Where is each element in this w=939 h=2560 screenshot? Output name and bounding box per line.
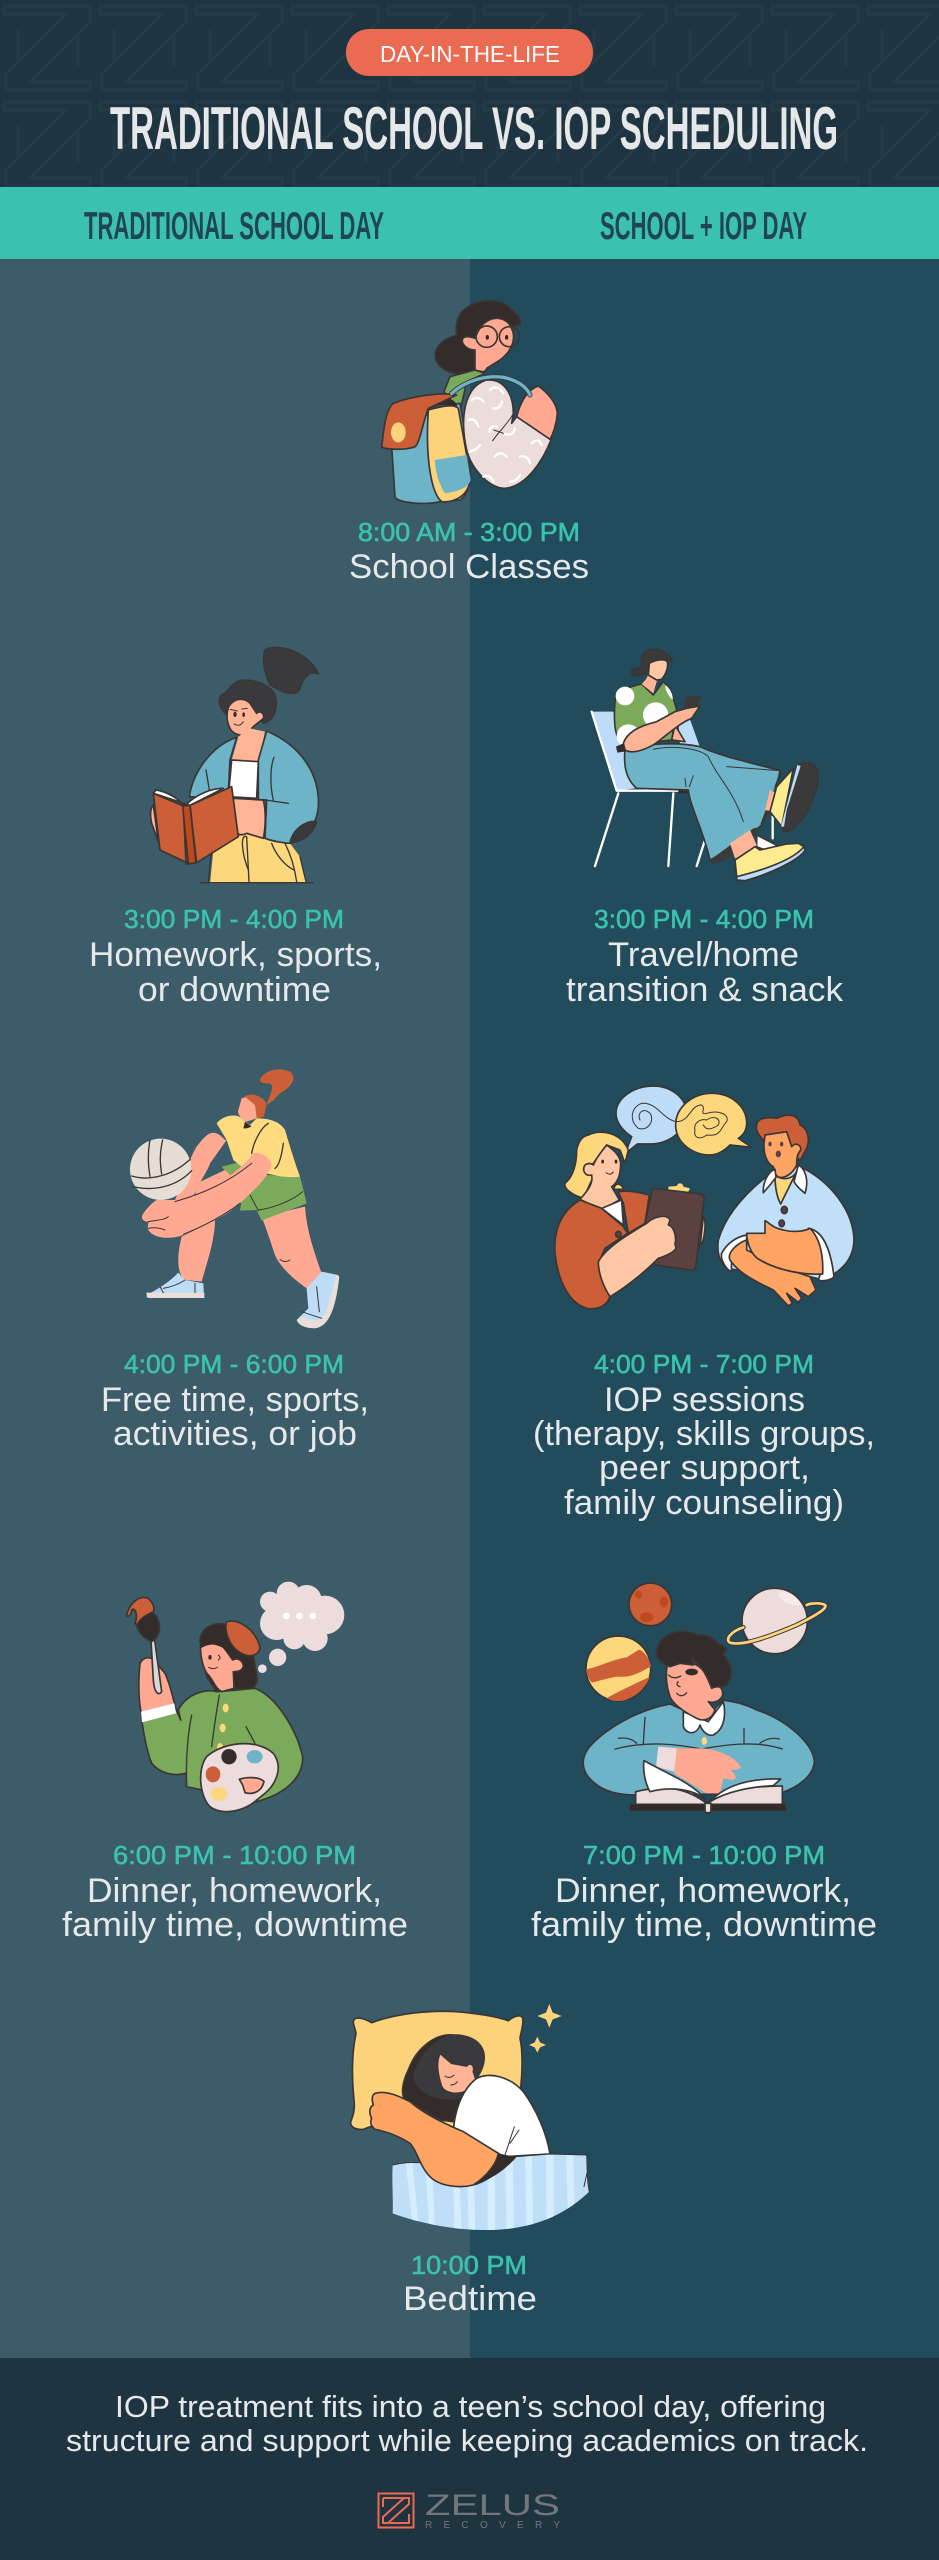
icon: dreaming student with planets (583, 1583, 825, 1813)
icon: woman on chair with phone (592, 649, 818, 881)
text: homework, sports, or downtime (89, 936, 382, 1009)
text: dinner, homework, family time, downtime left: Dinner, homework, (87, 1872, 382, 1910)
text: homework, sports, or downtime: Homework, sports, (89, 936, 382, 974)
text: IOP sessions list (533, 1381, 875, 1522)
text: free time, sports, activities, or job (101, 1381, 369, 1453)
label: 10:00 PM: 10:00 PM (411, 2250, 527, 2280)
text: IOP sessions list: (therapy, skills groups, (533, 1415, 875, 1453)
label: bedtime: Bedtime (403, 2280, 537, 2318)
label: 4:00 PM - 7:00 PM: 4:00 PM - 7:00 PM (594, 1349, 814, 1379)
icon: teen sleeping on pillow (351, 2004, 589, 2233)
text: free time, sports, activities, or job: Free time, sports, (101, 1381, 369, 1419)
label: 3:00 PM - 4:00 PM right: 3:00 PM - 4:00 PM (594, 904, 814, 934)
text: IOP sessions list: IOP sessions (604, 1381, 805, 1419)
label: 8:00 AM - 3:00 PM: 8:00 AM - 3:00 PM (358, 517, 580, 547)
panel: footer (0, 2358, 939, 2560)
text: dinner, homework, family time, downtime right (531, 1872, 877, 1944)
icon: girl reading a book (151, 647, 318, 883)
label: 7:00 PM - 10:00 PM: 7:00 PM - 10:00 PM (583, 1840, 825, 1870)
label: 3:00 PM - 4:00 PM left: 3:00 PM - 4:00 PM (124, 904, 344, 934)
label: 4:00 PM - 6:00 PM: 4:00 PM - 6:00 PM (124, 1349, 344, 1379)
label: 6:00 PM - 10:00 PM: 6:00 PM - 10:00 PM (113, 1840, 356, 1870)
badge: day-in-the-life: DAY-IN-THE-LIFE (380, 41, 560, 67)
heading: traditional school day: TRADITIONAL SCHOOL DAY (84, 205, 384, 248)
logo: Zelus Recovery (378, 2489, 560, 2531)
text: closing statement (66, 2389, 868, 2458)
text: IOP sessions list: family counseling) (564, 1484, 844, 1522)
text: travel/home transition & snack (566, 936, 844, 1009)
text: homework, sports, or downtime: or downtime (138, 971, 331, 1009)
icon: counselor and teen with speech bubbles (555, 1086, 854, 1309)
icon: girl with backpack (382, 301, 557, 503)
text: travel/home transition & snack: transition & snack (566, 971, 844, 1009)
text: dinner, homework, family time, downtime right: Dinner, homework, (555, 1872, 851, 1910)
text: dinner, homework, family time, downtime left: family time, downtime (62, 1906, 408, 1944)
panel: header background (0, 0, 939, 187)
logo: Zelus Recovery: ZELUS (425, 2489, 560, 2522)
logo: Zelus Recovery: RECOVERY (425, 2520, 560, 2531)
text: dinner, homework, family time, downtime right: family time, downtime (531, 1906, 877, 1944)
text: closing statement: IOP treatment fits into a teen’s school day, offering (115, 2389, 826, 2424)
panel: right column background (470, 259, 939, 2358)
text: IOP sessions list: peer support, (599, 1449, 810, 1487)
text: free time, sports, activities, or job: activities, or job (113, 1415, 357, 1453)
label: school classes: School Classes (349, 548, 589, 586)
panel: left column background (0, 259, 470, 2358)
text: dinner, homework, family time, downtime left (62, 1872, 408, 1944)
text: closing statement: structure and support while keeping academics on track. (66, 2423, 868, 2458)
icon: volleyball player (130, 1069, 339, 1328)
column header band (0, 187, 939, 259)
icon: painter with palette (127, 1582, 344, 1812)
badge: day-in-the-life (346, 29, 593, 76)
text: travel/home transition & snack: Travel/home (608, 936, 799, 974)
